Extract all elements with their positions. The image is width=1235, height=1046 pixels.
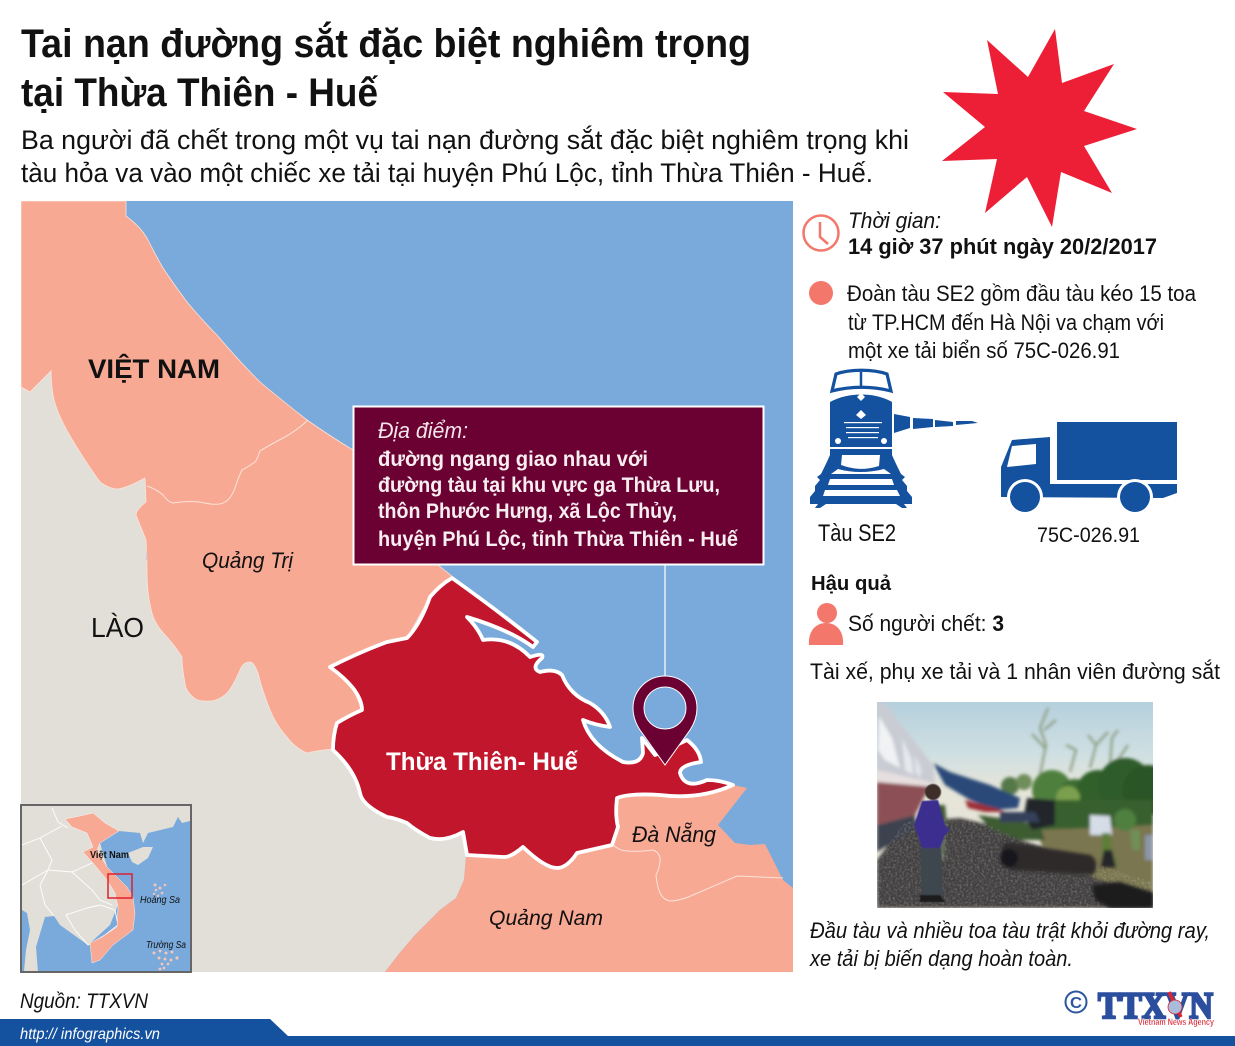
region: Thua Thien Hue [330, 578, 733, 868]
region: northern Vietnam provinces [21, 201, 453, 753]
intro text: tàu hỏa va vào một chiếc xe tải tại huyện Phú Lộc, tỉnh Thừa Thiên - Huế. [21, 158, 873, 188]
label: Laos: LÀO [91, 612, 144, 643]
region: Quang Nam and Da Nang [385, 785, 793, 972]
logo: TTXVN: C [1070, 995, 1082, 1012]
source: Nguồn: TTXVN [20, 990, 149, 1013]
intro text [21, 124, 909, 188]
icon: location pin [633, 676, 697, 765]
time text [848, 208, 1157, 259]
label: Da Nang: Đà Nẵng [632, 822, 717, 847]
intro text: Ba người đã chết trong một vụ tai nạn đường sắt đặc biệt nghiêm trọng khi [21, 124, 909, 155]
blue carriage [933, 763, 1020, 810]
gravel texture [877, 818, 1153, 908]
map panel [21, 201, 793, 972]
icon: train [810, 370, 978, 508]
Hainan island [128, 847, 153, 865]
region: Laos [21, 360, 490, 972]
photo caption: xe tải bị biến dạng hoàn toàn. [809, 946, 1073, 971]
locomotive base and rails [810, 449, 912, 508]
icon: person [809, 603, 843, 645]
icon: clock [804, 216, 838, 250]
inset labels: Trường Sa [146, 940, 186, 951]
time text: Thời gian: [848, 208, 941, 233]
train description: một xe tải biển số 75C-026.91 [848, 338, 1120, 363]
callout: location box: huyện Phú Lộc, tỉnh Thừa Thiên - Huế [378, 528, 738, 551]
callout: location box: Địa điểm: [378, 418, 468, 443]
bare tree branches [1032, 708, 1128, 775]
icon: truck [1001, 422, 1177, 515]
title: Tai nạn đường sắt đặc biệt nghiêm trọng [21, 20, 751, 66]
label: Quang Tri: Quảng Trị [202, 548, 294, 573]
train description: Đoàn tàu SE2 gồm đầu tàu kéo 15 toa [847, 281, 1197, 306]
train description: từ TP.HCM đến Hà Nội va chạm với [848, 310, 1164, 335]
man in blue [925, 784, 941, 800]
Spratly islands [152, 950, 179, 970]
label: Viet Nam: VIỆT NAM [88, 353, 220, 384]
heading: consequences: Hậu quả [811, 573, 892, 595]
tree line [1001, 777, 1019, 795]
victims text: Tài xế, phụ xe tải và 1 nhân viên đường sắt [810, 659, 1220, 684]
inset labels: Hoàng Sa [140, 895, 180, 906]
title [21, 20, 751, 115]
ground [877, 818, 1153, 908]
logo: TTXVN: TTXVN [1098, 986, 1213, 1027]
callout: location box: đường tàu tại khu vực ga Thừa Lưu, [378, 474, 720, 497]
icon: red explosion star [942, 29, 1137, 227]
sea [36, 817, 191, 972]
photo caption [809, 918, 1210, 971]
crowd [1000, 812, 1040, 822]
inset map [21, 805, 191, 972]
deaths count: Số người chết: 3 [848, 611, 1004, 636]
logo: TTXVN: Vietnam News Agency [1138, 1017, 1214, 1027]
callout: location box: thôn Phước Hưng, xã Lộc Thủy, [378, 500, 677, 523]
callout: location box: đường ngang giao nhau với [378, 448, 648, 471]
Paracel islands [153, 884, 166, 897]
inset labels [90, 850, 186, 951]
footer bar [0, 1019, 1235, 1046]
photo caption: Đầu tàu và nhiều toa tàu trật khỏi đường ray, [810, 918, 1210, 943]
footer bar: http:// infographics.vn [20, 1026, 160, 1043]
label: Quang Nam: Quảng Nam [489, 907, 603, 930]
debris [1092, 882, 1153, 908]
icon: bullet [809, 281, 833, 305]
land borders [22, 808, 118, 945]
near carriage [877, 702, 936, 784]
time text: 14 giờ 37 phút ngày 20/2/2017 [848, 234, 1157, 259]
locator square [108, 874, 132, 898]
title: tại Thừa Thiên - Huế [21, 71, 379, 115]
inset labels: Việt Nam [90, 850, 129, 861]
label: Thua Thien Hue: Thừa Thiên- Huế [386, 748, 578, 776]
pin connector line [664, 565, 666, 680]
province boundaries [147, 420, 783, 901]
callout: location box [354, 406, 764, 564]
Vietnam [65, 813, 135, 963]
train label: Tàu SE2 [818, 520, 896, 547]
wrecked wagon [1024, 798, 1055, 830]
black cylinder [1001, 842, 1096, 875]
truck plate label: 75C-026.91 [1037, 524, 1140, 547]
train description [847, 281, 1197, 363]
photo: derailed train [877, 702, 1173, 908]
